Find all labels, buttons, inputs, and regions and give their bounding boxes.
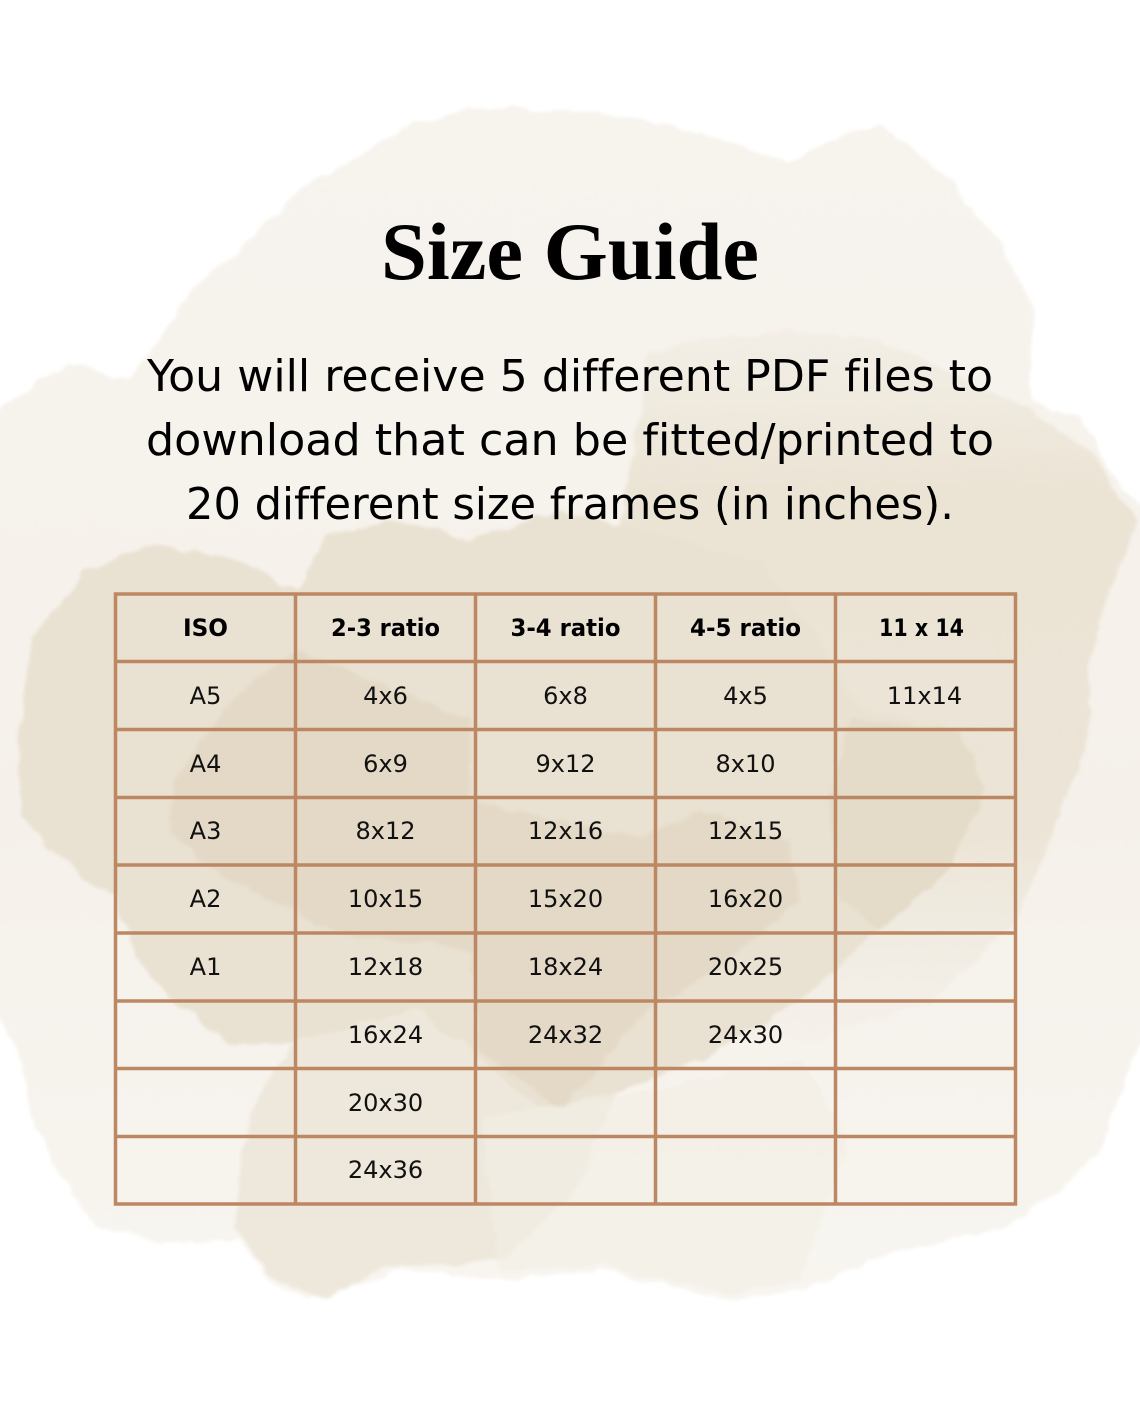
table body values: 24x36 [348,1156,423,1184]
table body values: 20x30 [348,1089,423,1117]
table body values: 18x24 [528,953,603,981]
table header row [183,614,964,642]
table body values: 4x5 [723,682,768,710]
table body values: 8x10 [715,750,776,778]
table body values: A1 [190,953,221,981]
size table [115,594,1016,1204]
table body values: 11x14 [887,682,962,710]
table body values: A4 [190,750,221,778]
intro text: 20 different size frames (in inches). [186,479,954,530]
table header row: ISO [183,614,228,642]
table header row: 11 x 14 [879,614,964,642]
table body values: 15x20 [528,885,603,913]
table body values: 16x20 [708,885,783,913]
table body values: 24x30 [708,1021,783,1049]
table header row: 3-4 ratio [510,614,620,642]
table grid [115,594,1016,1204]
table body values [190,682,962,1184]
table body values: 6x9 [363,750,408,778]
table body values: A5 [190,682,221,710]
table header row: 4-5 ratio [690,614,801,642]
table body values: 9x12 [535,750,596,778]
intro text [146,351,994,530]
title: Size Guide [381,206,759,297]
table header row: 2-3 ratio [331,614,440,642]
table body values: A3 [190,817,221,845]
intro text: download that can be fitted/printed to [146,415,994,466]
table body values: 4x6 [363,682,408,710]
table body values: 10x15 [348,885,423,913]
table body values: 12x15 [708,817,783,845]
table body values: 24x32 [528,1021,603,1049]
intro text: You will receive 5 different PDF files to [146,351,993,402]
table body values: 8x12 [355,817,416,845]
table body values: 12x18 [348,953,423,981]
table body values: A2 [190,885,221,913]
table body values: 6x8 [543,682,588,710]
table body values: 16x24 [348,1021,423,1049]
table body values: 12x16 [528,817,603,845]
table body values: 20x25 [708,953,783,981]
